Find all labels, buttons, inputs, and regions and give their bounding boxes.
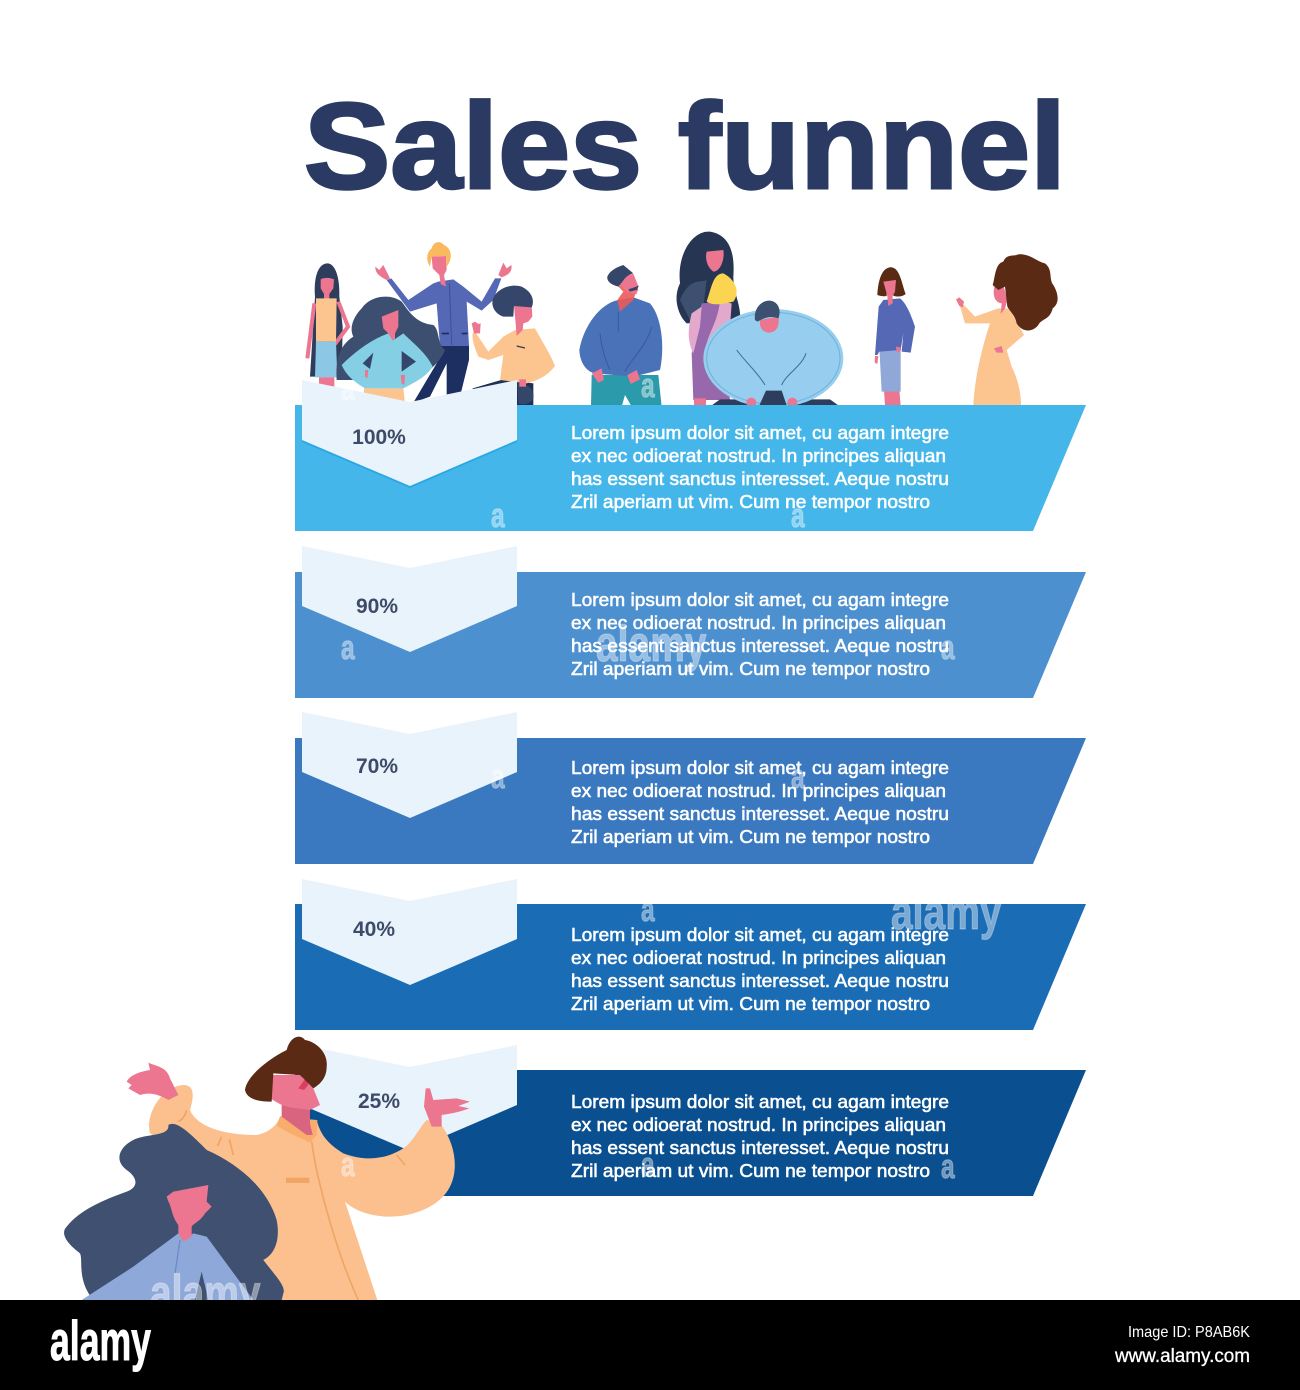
person: man in peach shirt waving <box>472 286 555 405</box>
text block bar 1: Lorem ipsum dolor sit amet, cu agam integre <box>571 423 949 443</box>
chevron 25% <box>302 1045 517 1151</box>
text block bar 1 <box>571 423 949 512</box>
watermark overlays: alamy <box>891 883 1002 940</box>
footer bar <box>0 1300 1300 1390</box>
person: very large man sitting <box>703 301 843 408</box>
chevron 90%: 90% <box>356 595 398 618</box>
chevron 25%: 25% <box>358 1090 400 1113</box>
watermark overlays <box>150 367 1002 1321</box>
text block bar 2: has essent sanctus interesset. Aeque nostru <box>571 636 949 656</box>
person: woman with dark wavy hair <box>64 1124 284 1300</box>
funnel bar 5 <box>295 1070 1086 1196</box>
watermark overlays: alamy <box>150 1264 261 1321</box>
text block bar 2: Lorem ipsum dolor sit amet, cu agam integre <box>571 590 949 610</box>
footer url: www.alamy.com <box>1114 1346 1250 1367</box>
text block bar 5: ex nec odioerat nostrud. In principes aliquan <box>571 1115 946 1135</box>
watermark overlays: a <box>491 497 505 535</box>
chevron 100% <box>302 380 517 488</box>
footer image id: Image ID: P8AB6K <box>1128 1324 1250 1341</box>
text block bar 4: Zril aperiam ut vim. Cum ne tempor nostro <box>571 994 930 1014</box>
person: man with arms raised <box>375 242 512 403</box>
chevron 70%: 70% <box>356 755 398 778</box>
funnel bar 3 <box>295 738 1086 864</box>
text block bar 4: Lorem ipsum dolor sit amet, cu agam integre <box>571 925 949 945</box>
illustration: crowd left group <box>307 242 662 407</box>
footer logo: alamy <box>50 1309 151 1372</box>
chevron 70% <box>302 712 517 818</box>
text block bar 2: ex nec odioerat nostrud. In principes aliquan <box>571 613 946 633</box>
chevron 100%: 100% <box>352 426 406 449</box>
text block bar 1: ex nec odioerat nostrud. In principes aliquan <box>571 446 946 466</box>
person: woman in blue jacket <box>875 267 915 406</box>
chevron 40%: 40% <box>353 918 395 941</box>
text block bar 3: has essent sanctus interesset. Aeque nostru <box>571 804 949 824</box>
title: Sales funnel <box>304 78 1066 214</box>
text block bar 3: Zril aperiam ut vim. Cum ne tempor nostro <box>571 827 930 847</box>
person: woman with yellow scarf <box>677 232 740 406</box>
watermark overlays: a <box>791 497 805 535</box>
funnel bar 1 <box>295 405 1086 531</box>
text block bar 5 <box>571 1092 949 1181</box>
text block bar 4 <box>571 925 949 1014</box>
watermark overlays: a <box>641 1146 655 1184</box>
watermark overlays: a <box>341 1146 355 1184</box>
illustration: presenters bottom left <box>64 1037 470 1300</box>
chevron 40% <box>302 879 517 985</box>
watermark overlays: alamy <box>596 615 707 672</box>
illustration: crowd right group <box>677 232 1058 408</box>
person: woman with wavy hair <box>336 297 445 403</box>
funnel bar 4 <box>295 904 1086 1030</box>
text block bar 4: has essent sanctus interesset. Aeque nostru <box>571 971 949 991</box>
text block bar 3: Lorem ipsum dolor sit amet, cu agam integre <box>571 758 949 778</box>
chevron 90% <box>302 546 517 652</box>
text block bar 5: has essent sanctus interesset. Aeque nostru <box>571 1138 949 1158</box>
funnel bar 2 <box>295 572 1086 698</box>
person: large man with moustache <box>579 265 662 407</box>
watermark overlays: a <box>791 758 805 796</box>
watermark overlays: a <box>341 370 355 408</box>
text block bar 1: has essent sanctus interesset. Aeque nostru <box>571 469 949 489</box>
text block bar 4: ex nec odioerat nostrud. In principes aliquan <box>571 948 946 968</box>
text block bar 2 <box>571 590 949 679</box>
text block bar 1: Zril aperiam ut vim. Cum ne tempor nostro <box>571 492 930 512</box>
watermark overlays: a <box>641 367 655 405</box>
watermark overlays: a <box>941 1148 955 1186</box>
text block bar 3 <box>571 758 949 847</box>
person: girl with long hair <box>307 263 348 387</box>
text block bar 5: Lorem ipsum dolor sit amet, cu agam integre <box>571 1092 949 1112</box>
watermark overlays: a <box>491 758 505 796</box>
text block bar 5: Zril aperiam ut vim. Cum ne tempor nostro <box>571 1161 930 1181</box>
person: man in peach shirt presenting <box>127 1037 470 1300</box>
person: woman in peach dress with curly hair <box>956 254 1058 405</box>
text block bar 3: ex nec odioerat nostrud. In principes aliquan <box>571 781 946 801</box>
watermark overlays: a <box>641 891 655 929</box>
watermark overlays: a <box>341 629 355 667</box>
watermark overlays: a <box>941 629 955 667</box>
text block bar 2: Zril aperiam ut vim. Cum ne tempor nostro <box>571 659 930 679</box>
